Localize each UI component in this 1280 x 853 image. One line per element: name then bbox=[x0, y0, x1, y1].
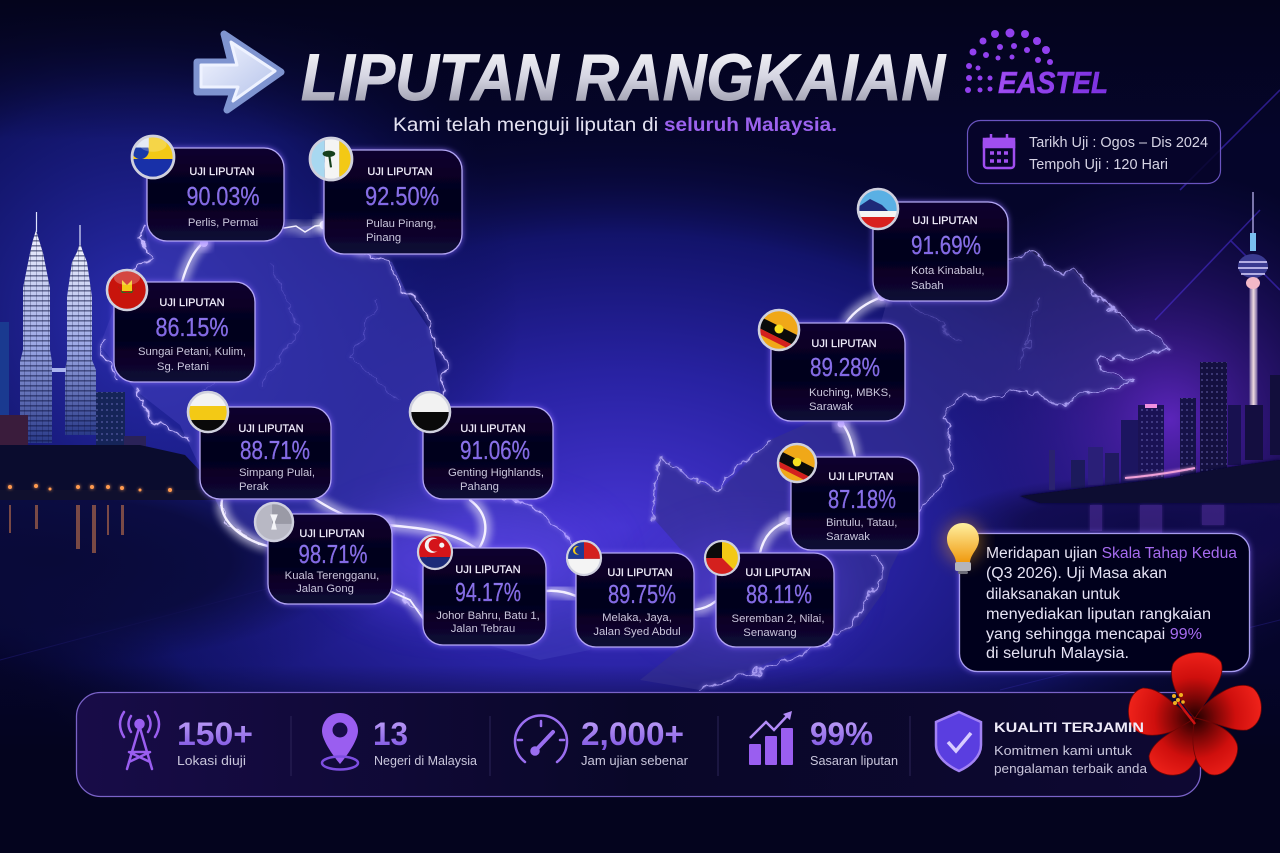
callout: next phase: Meridapan ujian Skala Tahap Kedua bbox=[986, 545, 1237, 562]
card: Bintulu 87.18%: Bintulu, Tatau, bbox=[826, 517, 897, 529]
network connection lines bbox=[182, 220, 886, 620]
flag: Sarawak (Kuching) bbox=[759, 310, 799, 354]
card: Perlis 90.03%: Perlis, Permai bbox=[188, 217, 258, 229]
card: Bintulu 87.18%: 87.18% bbox=[828, 484, 896, 514]
stat: locations bbox=[120, 712, 253, 769]
flag: Pulau Pinang bbox=[310, 138, 352, 180]
callout: next phase: dilaksanakan untuk bbox=[986, 586, 1120, 603]
title arrow icon bbox=[197, 34, 281, 110]
card: Kuching 89.28%: UJI LIPUTAN bbox=[811, 338, 877, 350]
flag: Negeri Sembilan bbox=[705, 541, 739, 575]
card: Perlis 90.03%: 90.03% bbox=[186, 181, 260, 211]
card: Kota Kinabalu 91.69%: Kota Kinabalu, bbox=[911, 265, 984, 277]
stat: quality: KUALITI TERJAMIN bbox=[994, 719, 1144, 735]
card: Perak 88.71% bbox=[188, 392, 331, 499]
stat: locations: Lokasi diuji bbox=[177, 753, 246, 768]
card: Negeri Sembilan 88.11%: UJI LIPUTAN bbox=[745, 567, 811, 579]
card: Johor 94.17%: Johor Bahru, Batu 1, bbox=[436, 610, 540, 622]
callout: next phase: yang sehingga mencapai 99% bbox=[986, 626, 1202, 643]
card: Negeri Sembilan 88.11%: Seremban 2, Nilai, bbox=[732, 613, 824, 625]
card: Pahang 91.06% bbox=[410, 392, 553, 499]
flag: Pahang bbox=[410, 392, 450, 432]
flag: Melaka bbox=[567, 541, 601, 575]
card: Perak 88.71%: Perak bbox=[239, 481, 269, 493]
card: Johor 94.17% bbox=[418, 535, 546, 645]
right skyline: KL Tower and city bbox=[940, 192, 1280, 575]
card: Pulau Pinang 92.50%: Pulau Pinang, bbox=[366, 218, 436, 230]
card: Johor 94.17%: UJI LIPUTAN bbox=[455, 564, 521, 576]
card: Kuching 89.28%: 89.28% bbox=[810, 352, 880, 382]
flag: Terengganu bbox=[255, 503, 293, 541]
icon: shield bbox=[936, 712, 981, 771]
card: Pahang 91.06%: 91.06% bbox=[460, 435, 530, 465]
callout: next phase bbox=[943, 520, 1250, 672]
card: Kedah 86.15%: Sg. Petani bbox=[157, 361, 209, 373]
card: Terengganu 98.71% bbox=[255, 503, 392, 604]
stat: hours: Jam ujian sebenar bbox=[581, 753, 689, 768]
stat: states: 13 bbox=[373, 716, 408, 752]
card: Kuching 89.28%: Kuching, MBKS, bbox=[809, 387, 891, 399]
left skyline: Petronas towers and KL waterfront bbox=[0, 212, 350, 665]
callout: next phase: di seluruh Malaysia. bbox=[986, 645, 1129, 662]
card: Perlis 90.03% bbox=[132, 136, 284, 241]
card: Melaka 89.75% bbox=[567, 541, 694, 647]
card: Terengganu 98.71%: Jalan Gong bbox=[296, 583, 354, 595]
stat: target bbox=[749, 711, 898, 768]
stat: target: 99% bbox=[810, 716, 873, 752]
card: Kota Kinabalu 91.69%: Sabah bbox=[911, 280, 944, 292]
icon: calendar bbox=[984, 134, 1014, 168]
callout: next phase: (Q3 2026). Uji Masa akan bbox=[986, 565, 1167, 582]
flag: Perlis bbox=[132, 136, 174, 178]
logo: Eastel bbox=[965, 28, 1108, 100]
card: Perak 88.71%: UJI LIPUTAN bbox=[238, 423, 304, 435]
flag: Johor bbox=[418, 535, 452, 569]
card: Kota Kinabalu 91.69%: 91.69% bbox=[911, 230, 981, 260]
card: Kota Kinabalu 91.69%: UJI LIPUTAN bbox=[912, 215, 978, 227]
card: Negeri Sembilan 88.11%: Senawang bbox=[743, 627, 797, 639]
flag: Sabah bbox=[858, 189, 898, 229]
card: Bintulu 87.18%: UJI LIPUTAN bbox=[828, 471, 894, 483]
card: Pulau Pinang 92.50% bbox=[310, 138, 462, 254]
card: Melaka 89.75%: Jalan Syed Abdul bbox=[593, 626, 681, 638]
card: Kota Kinabalu 91.69% bbox=[858, 189, 1008, 301]
card: Pahang 91.06%: Pahang bbox=[460, 481, 499, 493]
map: Peninsular Malaysia bbox=[100, 225, 590, 660]
map: East Malaysia bbox=[340, 250, 1168, 690]
card: Melaka 89.75%: UJI LIPUTAN bbox=[607, 567, 673, 579]
callout: next phase: menyediakan liputan rangkaian bbox=[986, 606, 1211, 623]
card: Perlis 90.03%: UJI LIPUTAN bbox=[189, 166, 255, 178]
icon: gauge bbox=[515, 716, 567, 762]
card: Perak 88.71%: Simpang Pulai, bbox=[239, 467, 315, 479]
card: Pahang 91.06%: Genting Highlands, bbox=[448, 467, 544, 479]
panel: test dates bbox=[968, 120, 1220, 184]
stat: target: Sasaran liputan bbox=[810, 753, 898, 768]
card: Pahang 91.06%: UJI LIPUTAN bbox=[460, 423, 526, 435]
card: Kedah 86.15%: UJI LIPUTAN bbox=[159, 297, 225, 309]
card: Terengganu 98.71%: UJI LIPUTAN bbox=[299, 528, 365, 540]
card: Kedah 86.15%: Sungai Petani, Kulim, bbox=[138, 346, 246, 358]
stat: quality bbox=[936, 712, 1148, 776]
title: LIPUTAN RANGKAIAN bbox=[301, 40, 946, 114]
card: Kedah 86.15% bbox=[107, 270, 255, 382]
card: Johor 94.17%: 94.17% bbox=[455, 577, 521, 607]
icon: signal tower bbox=[120, 712, 159, 769]
subtitle: Kami telah menguji liputan di seluruh Malaysia. bbox=[393, 114, 837, 136]
stat: hours: 2,000+ bbox=[581, 716, 684, 752]
icon: growth chart bbox=[749, 711, 793, 765]
card: Kuching 89.28%: Sarawak bbox=[809, 401, 853, 413]
card: Melaka 89.75%: Melaka, Jaya, bbox=[602, 612, 672, 624]
card: Melaka 89.75%: 89.75% bbox=[608, 579, 676, 609]
panel: test dates: Tarikh Uji : Ogos – Dis 2024 bbox=[1029, 135, 1208, 151]
stat: quality: Komitmen kami untuk bbox=[994, 743, 1133, 758]
card: Terengganu 98.71%: Kuala Terengganu, bbox=[285, 570, 379, 582]
stat: states: Negeri di Malaysia bbox=[374, 753, 478, 768]
stat: hours bbox=[515, 716, 689, 768]
flag: Perak bbox=[188, 392, 228, 432]
card: Terengganu 98.71%: 98.71% bbox=[298, 539, 368, 569]
panel: summary stats bbox=[76, 692, 1200, 796]
stat: states bbox=[322, 713, 478, 770]
logo: Eastel: EASTEL bbox=[998, 65, 1108, 100]
panel: test dates: Tempoh Uji : 120 Hari bbox=[1029, 157, 1168, 173]
icon: light bulb bbox=[943, 520, 983, 574]
flag: Sarawak (Bintulu) bbox=[778, 444, 816, 486]
card: Johor 94.17%: Jalan Tebrau bbox=[451, 623, 515, 635]
stat: quality: pengalaman terbaik anda bbox=[994, 761, 1148, 776]
card: Pulau Pinang 92.50%: Pinang bbox=[366, 232, 401, 244]
card: Kuching 89.28% bbox=[759, 310, 905, 421]
card: Bintulu 87.18%: Sarawak bbox=[826, 531, 870, 543]
icon: map pin bbox=[322, 713, 358, 770]
flag: Kedah bbox=[107, 270, 147, 310]
card: Kedah 86.15%: 86.15% bbox=[156, 312, 228, 342]
card: Bintulu 87.18% bbox=[778, 444, 919, 550]
card: Pulau Pinang 92.50%: UJI LIPUTAN bbox=[367, 166, 433, 178]
card: Pulau Pinang 92.50%: 92.50% bbox=[365, 181, 439, 211]
card: Negeri Sembilan 88.11% bbox=[705, 541, 834, 647]
card: Perak 88.71%: 88.71% bbox=[240, 435, 310, 465]
icon: hibiscus flower bbox=[1128, 652, 1261, 775]
stat: locations: 150+ bbox=[177, 716, 253, 752]
card: Negeri Sembilan 88.11%: 88.11% bbox=[746, 579, 812, 609]
